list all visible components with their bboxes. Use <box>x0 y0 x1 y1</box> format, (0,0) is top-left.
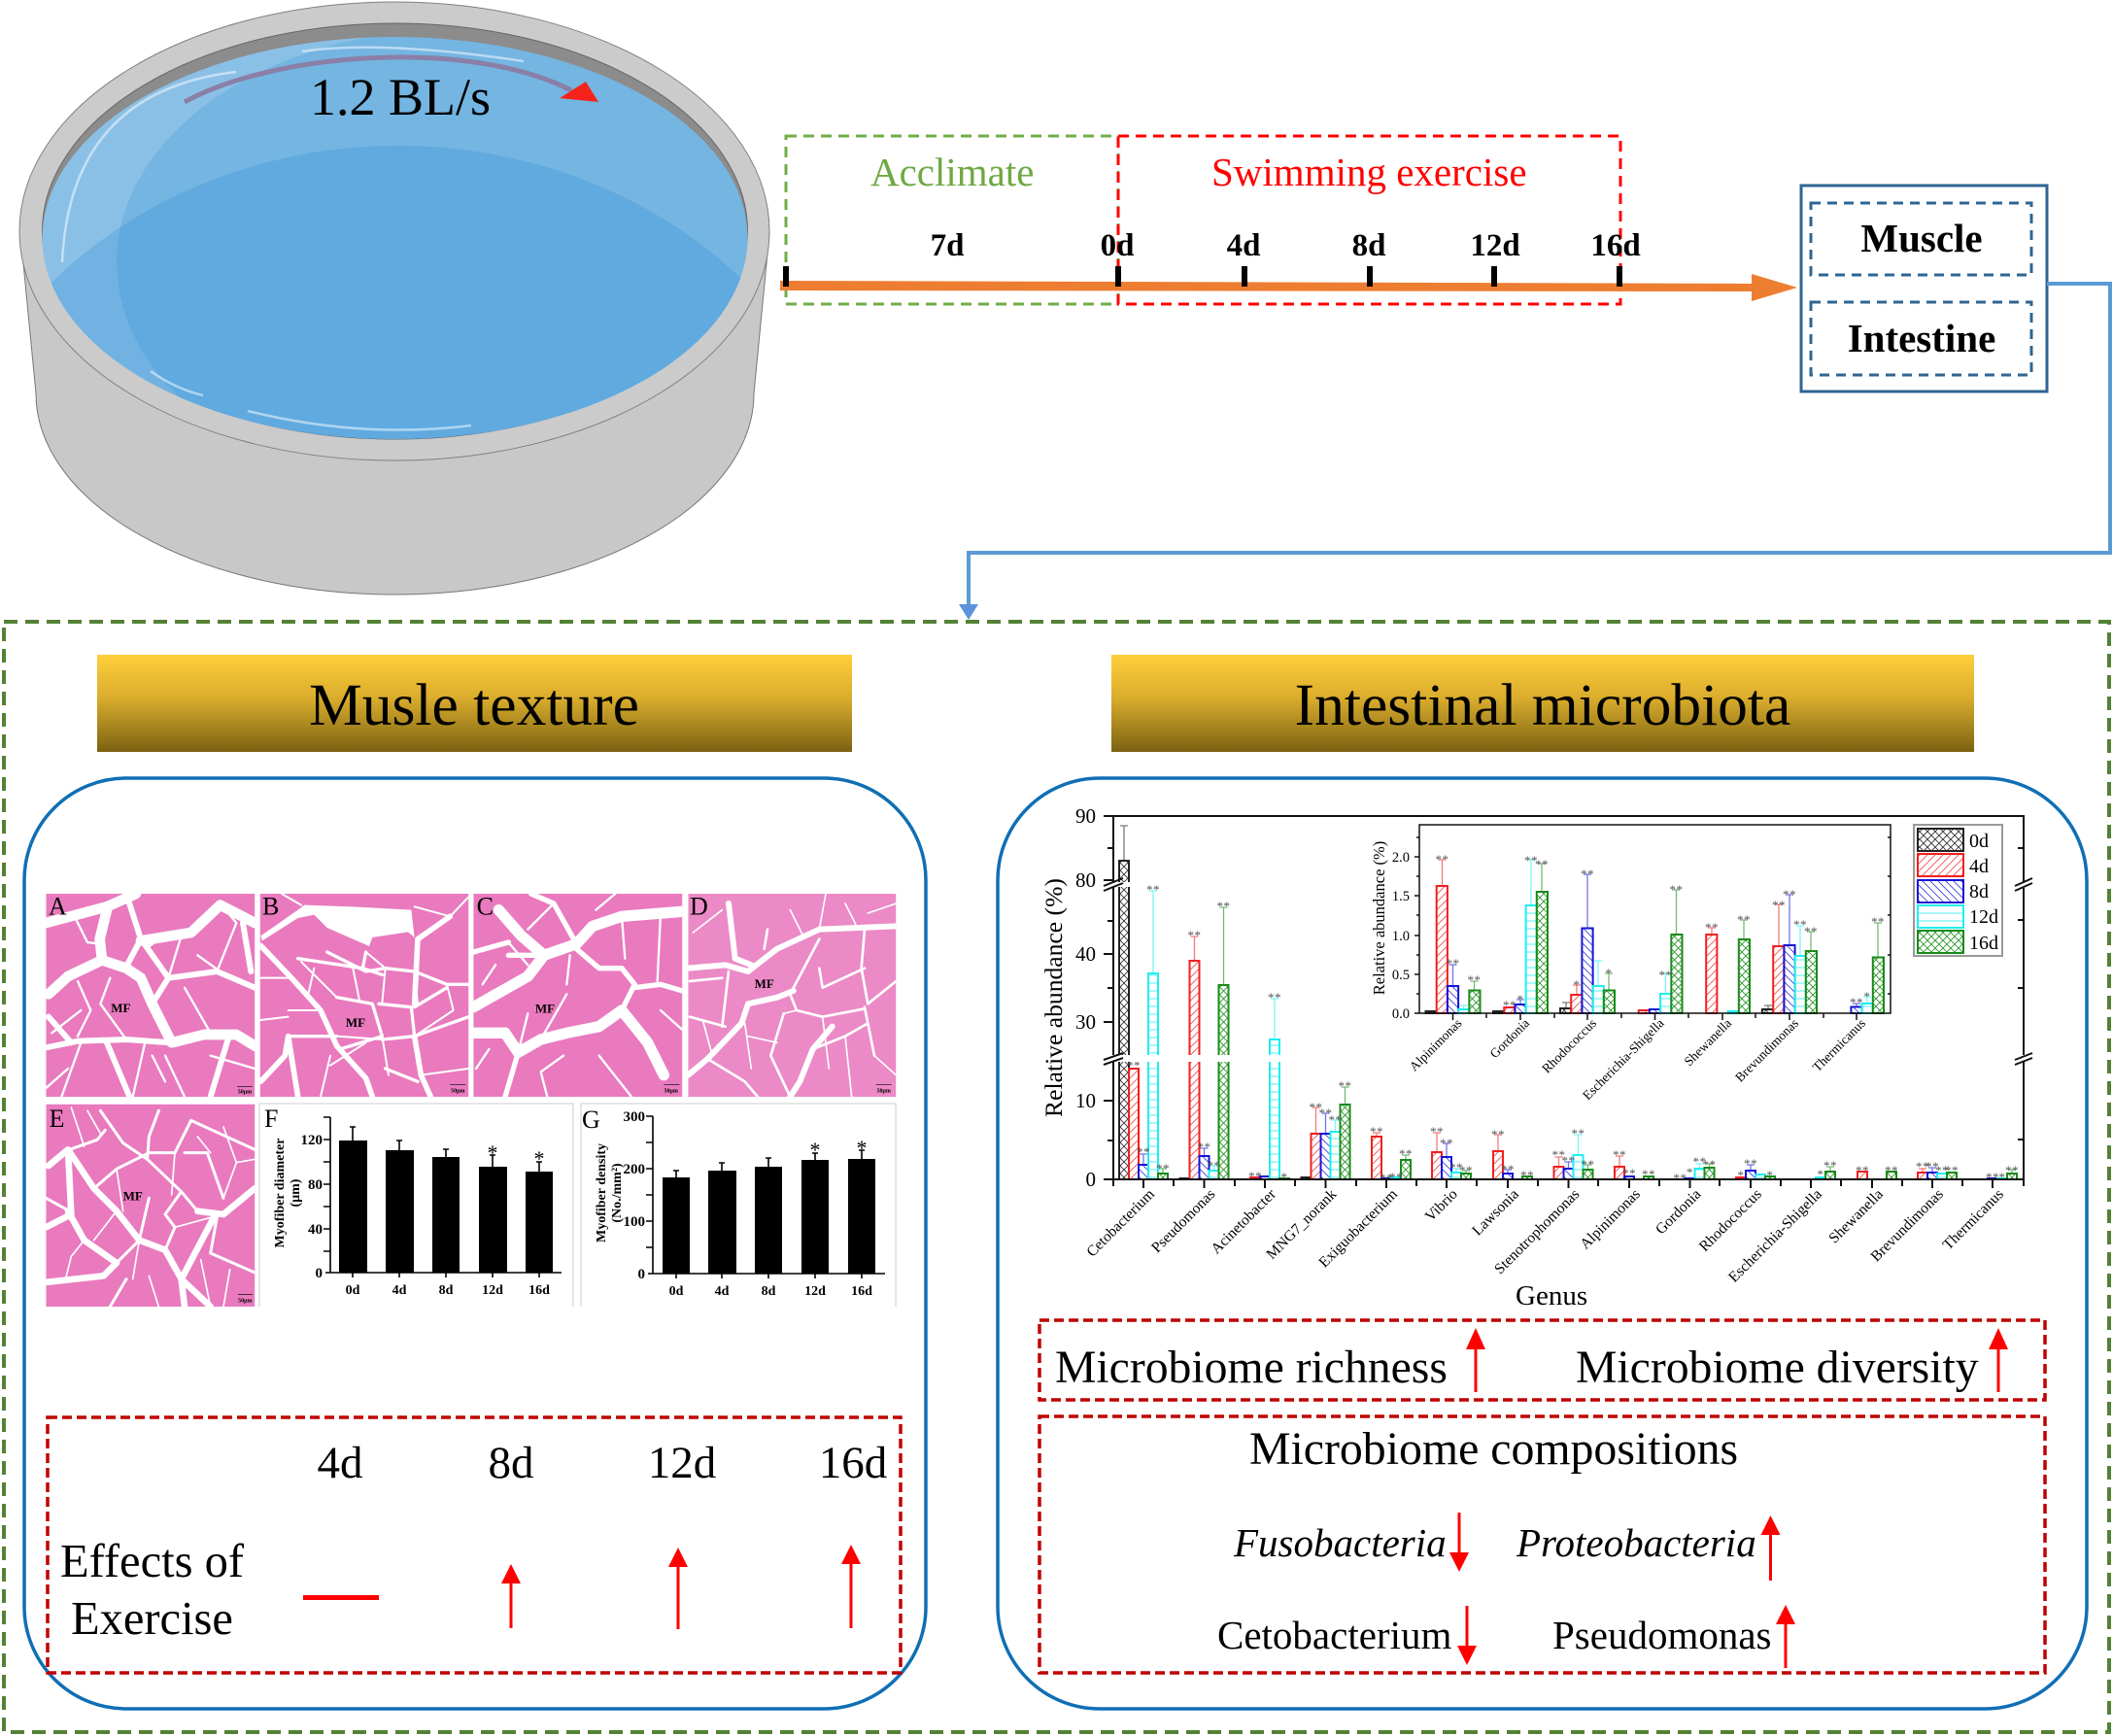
inset series: Brevundimonas: ** <box>1804 924 1818 938</box>
heading: intestinal microbiota <box>1111 655 1974 752</box>
heading: swimming exercise: Swimming exercise <box>1211 150 1527 194</box>
series: Pseudomonas: ** <box>1207 1158 1220 1173</box>
y axis tick labels: 80 <box>1075 868 1096 892</box>
series: MNG7_norank: ** <box>1310 1100 1323 1114</box>
inset x labels: Shewanella <box>1682 1016 1734 1069</box>
series: Alpinimonas: ** <box>1642 1167 1655 1181</box>
bar chart G: myofiber density: 8d <box>762 1284 776 1299</box>
panel: sampled tissues <box>1801 186 2047 391</box>
series: Exiguobacterium <box>1370 1124 1413 1185</box>
scale bar <box>237 1086 253 1095</box>
inset x labels: Rhodococcus <box>1539 1016 1599 1076</box>
day headers: 4d <box>317 1438 363 1488</box>
heading: intestinal microbiota: Intestinal microbiota <box>1295 672 1790 738</box>
box: intestine: Intestine <box>1848 316 1995 360</box>
bar chart F: myofiber diameter: 16d <box>528 1283 550 1298</box>
x axis genus labels: Cetobacterium <box>1083 1186 1158 1260</box>
inset y tick labels <box>1392 850 1410 1022</box>
inset series: Alpinimonas <box>1426 852 1481 1013</box>
bar chart G: myofiber density: * <box>810 1138 820 1162</box>
y axis title: Myofiber diameter <box>273 1139 288 1247</box>
series: Cetobacterium <box>1119 826 1170 1179</box>
legend: sampling day: 0d <box>1969 831 1989 852</box>
series: Brevundimonas: ** <box>1926 1159 1939 1174</box>
day labels <box>931 228 1641 263</box>
bar chart G: myofiber density <box>581 1104 896 1307</box>
series: Stenotrophomonas <box>1552 1126 1595 1179</box>
histology panel C <box>473 893 682 1097</box>
bar chart G: myofiber density: 0d <box>669 1284 684 1299</box>
box: intestine <box>1811 302 2031 375</box>
inset y tick labels: 0.0 <box>1392 1006 1410 1022</box>
histology panel B <box>260 893 468 1097</box>
legend: sampling day <box>1914 825 2002 956</box>
x axis genus labels: MNG7_norank <box>1263 1186 1340 1263</box>
series: Vibrio: ** <box>1430 1124 1444 1139</box>
x axis genus labels: Rhodococcus <box>1696 1186 1765 1255</box>
row label <box>60 1536 245 1645</box>
histology panel E <box>46 1105 255 1307</box>
bar chart F: myofiber diameter: 120 <box>301 1133 323 1148</box>
series: Gordonia: ** <box>1702 1157 1716 1172</box>
series: MNG7_norank: ** <box>1339 1078 1352 1093</box>
y axis tick labels: 10 <box>1075 1089 1096 1112</box>
inset series: Escherichia-Shigella <box>1639 882 1683 1013</box>
series: Acinetobacter: * <box>1280 1170 1288 1184</box>
bar chart F: myofiber diameter <box>259 1104 573 1307</box>
series: Vibrio <box>1430 1124 1473 1179</box>
day headers: 16d <box>819 1438 887 1488</box>
inset y tick labels: 1.5 <box>1392 889 1410 904</box>
series: Vibrio: ** <box>1459 1163 1473 1177</box>
inset series: Gordonia: ** <box>1503 998 1517 1012</box>
day headers <box>317 1438 887 1488</box>
heading: compositions: Microbiome compositions <box>1249 1423 1738 1475</box>
arrow: increase at 8d <box>501 1564 521 1628</box>
inset x labels <box>1407 1016 1868 1103</box>
bar chart F: myofiber diameter: 12d <box>482 1283 503 1298</box>
inset series: Thermicanus: ** <box>1871 914 1885 929</box>
series: MNG7_norank: ** <box>1329 1112 1343 1127</box>
label: flow speed: 1.2 BL/s <box>310 68 491 126</box>
text: Cetobacterium: Cetobacterium <box>1217 1613 1451 1657</box>
y axis tick labels: 40 <box>1075 942 1096 966</box>
legend: sampling day: 12d <box>1969 906 1998 928</box>
axes <box>1104 816 2024 1188</box>
x axis genus labels: Stenotrophomonas <box>1491 1186 1583 1277</box>
heading: muscle texture <box>97 655 852 752</box>
series: Lawsonia <box>1491 1127 1534 1182</box>
histology panel A <box>46 893 255 1097</box>
histology panel D <box>688 893 896 1097</box>
y axis tick labels: 0 <box>1086 1168 1096 1191</box>
series: Cetobacterium: ** <box>1156 1161 1170 1175</box>
callout: microbiome compositions <box>1039 1416 2045 1673</box>
panel: muscle texture outline <box>24 778 926 1709</box>
bar chart G: myofiber density: 100 <box>624 1214 645 1230</box>
scale bar <box>238 1295 253 1305</box>
series: Acinetobacter: ** <box>1248 1169 1262 1183</box>
inset x labels: Escherichia-Shigella <box>1580 1016 1667 1103</box>
series: Escherichia-Shigella: ** <box>1823 1158 1837 1173</box>
inset series: Thermicanus <box>1850 914 1885 1013</box>
day headers: 12d <box>648 1438 716 1488</box>
y axis title <box>273 1139 303 1247</box>
series: Thermicanus <box>1986 1163 2019 1184</box>
label: C: C <box>477 893 494 921</box>
day labels: 7d <box>931 228 964 263</box>
text: Proteobacteria: Proteobacteria <box>1516 1520 1756 1565</box>
inset series: Gordonia: ** <box>1524 853 1538 868</box>
box: swimming exercise period <box>1118 136 1620 304</box>
series: Shewanella: ** <box>1856 1163 1869 1177</box>
bar chart G: myofiber density: 4d <box>715 1284 730 1299</box>
label: myofiber: MF <box>346 1015 365 1030</box>
day labels: 4d <box>1227 228 1260 263</box>
legend: sampling day: 4d <box>1969 856 1989 877</box>
no-change dash at 4d <box>303 1595 379 1600</box>
label: myofiber: MF <box>535 1001 555 1015</box>
series: Gordonia: * <box>1687 1165 1693 1179</box>
bar chart: relative abundance by genus <box>1039 804 2032 1311</box>
series: Brevundimonas <box>1916 1159 1959 1179</box>
series: Vibrio: ** <box>1440 1136 1453 1150</box>
series: Thermicanus: ** <box>2005 1163 2019 1177</box>
arrow: water flow direction <box>185 57 598 102</box>
bar chart F: myofiber diameter: * <box>534 1146 544 1171</box>
arrow: richness up <box>1466 1328 1485 1392</box>
label: E: E <box>50 1105 65 1133</box>
inset series: Gordonia: * <box>1517 992 1523 1006</box>
bar chart G: myofiber density: 200 <box>624 1162 645 1177</box>
inset y axis title: Relative abundance (%) <box>1370 841 1388 995</box>
inset series: Alpinimonas: ** <box>1446 956 1459 970</box>
inset bar chart: low-abundance genera <box>1370 825 1891 1103</box>
scale bar: 50μm <box>238 1299 253 1305</box>
series: Shewanella: ** <box>1885 1163 1898 1177</box>
inset y tick labels: 2.0 <box>1392 850 1410 866</box>
y axis title: Myofiber density <box>595 1143 609 1242</box>
box: acclimate period <box>786 136 1118 304</box>
series: Alpinimonas <box>1613 1147 1655 1181</box>
y axis tick labels: 90 <box>1075 804 1096 828</box>
series: Gordonia: ** <box>1692 1154 1706 1169</box>
panel: results frame <box>4 622 2109 1732</box>
inset y tick labels: 0.5 <box>1392 968 1410 983</box>
scale bar: 50μm <box>451 1089 465 1095</box>
scale bar: 50μm <box>876 1089 891 1095</box>
series: Thermicanus: * <box>1999 1170 2005 1184</box>
scale bar <box>876 1085 892 1095</box>
bar chart F: myofiber diameter: 8d <box>439 1283 454 1298</box>
label: A: A <box>49 893 67 921</box>
inset series: Brevundimonas: ** <box>1772 898 1786 912</box>
inset x labels: Thermicanus <box>1810 1016 1868 1074</box>
series: Escherichia-Shigella <box>1816 1158 1837 1181</box>
arrow: increase at 16d <box>841 1545 861 1628</box>
series: Pseudomonas <box>1179 899 1230 1179</box>
scale bar: 50μm <box>238 1089 252 1095</box>
series: Lawsonia: ** <box>1491 1127 1505 1141</box>
series: Pseudomonas: ** <box>1187 928 1201 942</box>
bar chart G: myofiber density: 0 <box>637 1267 645 1282</box>
scale bar: 50μm <box>664 1089 678 1095</box>
series: Alpinimonas: ** <box>1622 1166 1636 1180</box>
inset series: Rhodococcus <box>1560 867 1615 1013</box>
inset x labels: Gordonia <box>1486 1016 1532 1061</box>
series: Gordonia: ** <box>1673 1171 1687 1185</box>
arrow: Cetobacterium down <box>1457 1606 1477 1665</box>
inset series: Thermicanus: ** <box>1850 995 1863 1009</box>
bar chart F: myofiber diameter: 4d <box>392 1283 407 1298</box>
day ticks <box>783 266 1622 287</box>
arrow: Pseudomonas up <box>1776 1605 1795 1668</box>
y axis title: (No./mm²) <box>610 1163 625 1223</box>
bar chart F: myofiber diameter: 80 <box>308 1177 323 1193</box>
label: myofiber: MF <box>111 1001 130 1015</box>
arrow: Proteobacteria up <box>1760 1515 1780 1581</box>
x axis genus labels: Escherichia-Shigella <box>1725 1186 1825 1286</box>
timeline: acclimation and exercise schedule <box>780 136 1797 304</box>
series: Rhodococcus: * <box>1766 1168 1774 1182</box>
day labels: 8d <box>1352 228 1385 263</box>
inset series: Shewanella: ** <box>1705 920 1719 935</box>
legend: sampling day: 8d <box>1969 881 1989 902</box>
inset series: Escherichia-Shigella: ** <box>1659 968 1673 982</box>
bar chart G: myofiber density: * <box>857 1136 867 1160</box>
bar chart F: myofiber diameter: * <box>488 1140 497 1165</box>
day labels: 0d <box>1101 228 1134 263</box>
inset series: Shewanella <box>1705 912 1751 1013</box>
inset series: Alpinimonas: ** <box>1436 852 1449 867</box>
series: Stenotrophomonas: ** <box>1562 1153 1576 1168</box>
y axis tick labels <box>1075 804 1096 1191</box>
series: MNG7_norank: ** <box>1319 1106 1333 1120</box>
inset series: Gordonia <box>1493 853 1549 1013</box>
x axis title: Genus <box>1516 1280 1587 1311</box>
label: myofiber: MF <box>755 976 774 991</box>
inset y tick labels: 1.0 <box>1392 929 1410 944</box>
series: Cetobacterium: ** <box>1127 1058 1141 1072</box>
row label: Exercise <box>71 1593 233 1645</box>
callout: microbiome richness and diversity <box>1039 1320 2045 1400</box>
scale bar <box>664 1085 679 1095</box>
series: Rhodococcus <box>1736 1156 1775 1182</box>
series: Alpinimonas: ** <box>1613 1147 1626 1162</box>
x axis genus labels: Acinetobacter <box>1208 1185 1279 1257</box>
series: Pseudomonas: ** <box>1197 1140 1210 1154</box>
callout: effects of exercise on muscle <box>48 1417 901 1673</box>
text: richness: Microbiome richness <box>1055 1342 1448 1393</box>
series: Acinetobacter <box>1248 990 1289 1184</box>
panel: intestinal microbiota outline <box>998 778 2087 1709</box>
inset x labels: Alpinimonas <box>1407 1016 1465 1073</box>
text: diversity: Microbiome diversity <box>1576 1342 1979 1393</box>
series: Lawsonia: ** <box>1501 1162 1515 1176</box>
bar chart G: myofiber density: 12d <box>804 1284 826 1299</box>
inset series: Shewanella: ** <box>1737 912 1751 927</box>
series: Brevundimonas: ** <box>1916 1159 1929 1174</box>
x axis genus labels: Alpinimonas <box>1577 1186 1644 1252</box>
inset series: Rhodococcus: * <box>1574 977 1580 992</box>
bar chart G: myofiber density: 16d <box>851 1284 872 1299</box>
x axis genus labels: Shewanella <box>1825 1186 1887 1246</box>
x axis genus labels: Vibrio <box>1422 1186 1461 1225</box>
inset series: Escherichia-Shigella: ** <box>1669 882 1683 897</box>
arrow: time axis <box>780 274 1797 301</box>
row label: Effects of <box>60 1536 245 1587</box>
scale bar <box>450 1085 465 1095</box>
legend: sampling day: 16d <box>1969 933 1998 954</box>
series: Exiguobacterium: ** <box>1380 1171 1393 1185</box>
heading: muscle texture: Musle texture <box>309 672 639 738</box>
x axis genus labels: Pseudomonas <box>1148 1186 1218 1256</box>
label: G: G <box>582 1106 600 1134</box>
x axis genus labels <box>1083 1185 2007 1286</box>
series: Vibrio: ** <box>1449 1160 1463 1174</box>
icon: circular swimming tank <box>19 2 769 595</box>
series: Shewanella <box>1856 1163 1898 1179</box>
box: muscle <box>1811 203 2031 275</box>
series: Cetobacterium: ** <box>1137 1144 1150 1159</box>
inset series: Brevundimonas: ** <box>1793 917 1807 932</box>
series: Cetobacterium: ** <box>1146 882 1160 897</box>
axis break strips <box>1108 882 2030 1062</box>
bar chart F: myofiber diameter: 0d <box>346 1283 360 1298</box>
y axis tick labels: 30 <box>1075 1010 1096 1034</box>
series: Gordonia <box>1673 1154 1716 1185</box>
x axis genus labels: Gordonia <box>1653 1186 1704 1238</box>
series: Rhodococcus: ** <box>1744 1156 1757 1171</box>
series: Rhodococcus: * <box>1737 1168 1745 1182</box>
series: Acinetobacter: ** <box>1268 990 1281 1004</box>
label: D: D <box>690 893 708 921</box>
y axis title: (μm) <box>289 1178 303 1207</box>
inset series: Rhodococcus: ** <box>1581 867 1594 881</box>
inset series: Rhodococcus: * <box>1605 966 1613 980</box>
bar chart F: myofiber diameter: 40 <box>308 1222 323 1238</box>
arrow: increase at 12d <box>668 1548 688 1629</box>
arrow: connector from tissues to results <box>959 284 2110 620</box>
inset series: Thermicanus: * <box>1863 989 1871 1004</box>
series: Exiguobacterium: ** <box>1389 1170 1403 1184</box>
series: Stenotrophomonas: ** <box>1572 1126 1585 1140</box>
series: Brevundimonas: ** <box>1945 1163 1959 1177</box>
day labels: 12d <box>1470 228 1520 263</box>
series: Exiguobacterium: ** <box>1399 1146 1413 1161</box>
series: Exiguobacterium: ** <box>1370 1124 1383 1139</box>
series: Stenotrophomonas: ** <box>1552 1147 1566 1162</box>
x axis genus labels: Brevundimonas <box>1867 1186 1947 1265</box>
arrow: diversity up <box>1989 1328 2008 1392</box>
inset series: Brevundimonas <box>1762 887 1818 1013</box>
series: Pseudomonas: ** <box>1216 899 1230 913</box>
series: Escherichia-Shigella: * <box>1817 1167 1824 1181</box>
series: Stenotrophomonas: ** <box>1582 1157 1595 1172</box>
series: Thermicanus: ** <box>1986 1170 1999 1184</box>
day labels: 16d <box>1590 228 1641 263</box>
x axis genus labels: Lawsonia <box>1469 1186 1522 1239</box>
inset series: Alpinimonas: ** <box>1467 972 1481 987</box>
bar chart F: myofiber diameter: 0 <box>315 1266 323 1281</box>
series: Lawsonia: ** <box>1520 1168 1534 1182</box>
label: myofiber: MF <box>123 1188 143 1203</box>
y axis title <box>595 1143 625 1242</box>
x axis genus labels: Thermicanus <box>1940 1186 2007 1253</box>
inset series: Gordonia: ** <box>1535 857 1549 871</box>
day headers: 8d <box>488 1438 534 1488</box>
label: F: F <box>264 1105 278 1133</box>
inset x labels: Brevundimonas <box>1732 1016 1801 1085</box>
inset frame and ticks <box>1414 825 1891 1020</box>
heading: acclimate: Acclimate <box>870 150 1034 194</box>
box: muscle: Muscle <box>1860 216 1983 260</box>
bar chart G: myofiber density: 300 <box>624 1109 645 1125</box>
y axis title: Relative abundance (%) <box>1039 878 1068 1117</box>
inset series: Brevundimonas: ** <box>1783 887 1796 902</box>
label: B: B <box>262 893 279 921</box>
axis break marks <box>1104 878 2032 1065</box>
text: Fusobacteria: Fusobacteria <box>1233 1520 1447 1565</box>
x axis genus labels: Exiguobacterium <box>1315 1186 1401 1271</box>
text: Pseudomonas: Pseudomonas <box>1552 1613 1772 1657</box>
arrow: Fusobacteria down <box>1449 1513 1469 1572</box>
series: MNG7_norank <box>1302 1078 1352 1179</box>
series: Brevundimonas: ** <box>1935 1163 1949 1177</box>
